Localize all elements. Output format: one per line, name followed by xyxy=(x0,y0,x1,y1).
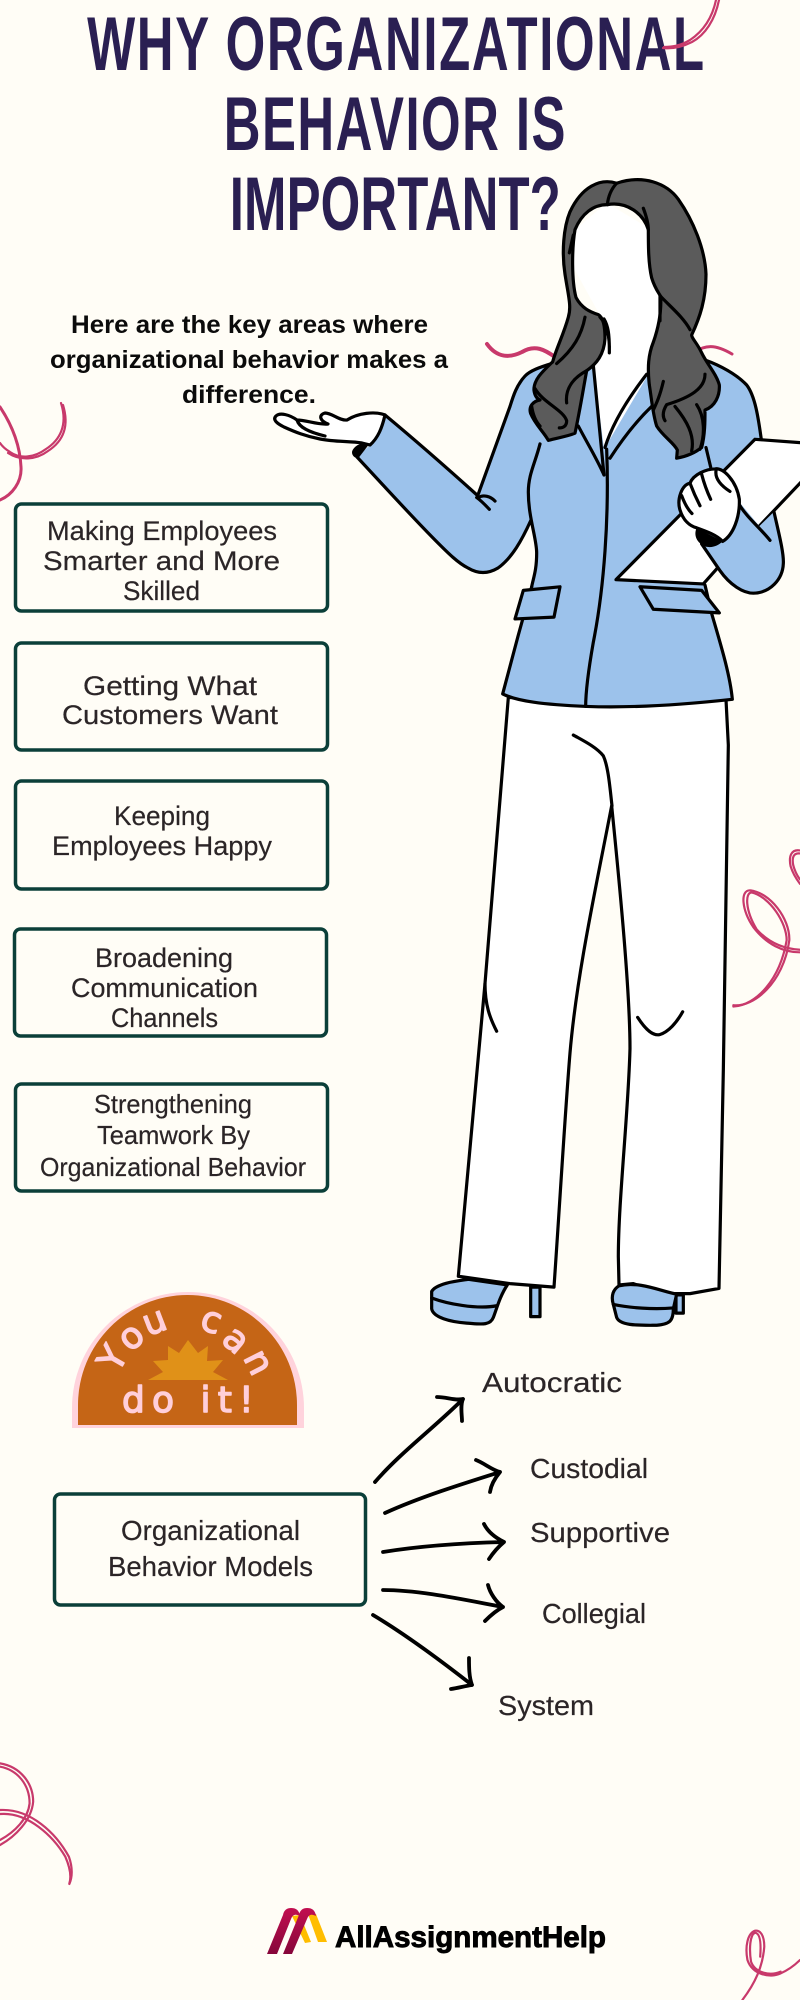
list box: skills: Smarter and More xyxy=(43,546,280,576)
arrow: custodial xyxy=(385,1460,500,1513)
list box: teamwork: Organizational Behavior xyxy=(40,1152,306,1182)
models box: Organizational xyxy=(121,1515,300,1546)
hand with cuff xyxy=(679,469,739,547)
cuff xyxy=(353,444,368,457)
squiggle: shoulder wave right xyxy=(695,347,732,354)
subtitle text: difference. xyxy=(182,381,316,409)
pockets xyxy=(515,587,560,619)
badge: you can do it: u xyxy=(136,1298,172,1345)
hair xyxy=(530,180,719,458)
arrow: supportive xyxy=(383,1524,504,1559)
sun icon xyxy=(148,1340,228,1380)
squiggle: upper left xyxy=(0,403,66,500)
list box: happy employees xyxy=(16,781,328,889)
right shoe xyxy=(612,1284,683,1325)
squiggle: bottom left xyxy=(0,1763,72,1884)
arrow: collegial xyxy=(383,1585,503,1621)
model labels: Autocratic xyxy=(482,1367,622,1398)
list box: skills xyxy=(16,504,328,611)
list box: communication: Communication xyxy=(71,973,258,1003)
face and neck xyxy=(573,203,663,449)
woman illustration xyxy=(275,180,800,1325)
logo mark xyxy=(267,1908,327,1954)
models box: Behavior Models xyxy=(108,1551,313,1582)
list box: skills: Making Employees xyxy=(47,516,277,546)
list box: communication: Channels xyxy=(111,1003,218,1033)
badge: you can do it: n xyxy=(235,1343,282,1382)
list box: happy employees: Employees Happy xyxy=(52,831,272,861)
pants xyxy=(432,697,728,1325)
jacket details xyxy=(578,365,652,475)
model labels xyxy=(482,1367,670,1721)
subtitle text: organizational behavior makes a xyxy=(50,346,449,374)
arrow: system xyxy=(373,1615,472,1689)
squiggle: top right xyxy=(663,0,719,48)
left shoe xyxy=(432,1279,540,1324)
badge: you can do it: it! xyxy=(200,1380,254,1421)
badge: you can do it: Y xyxy=(90,1338,137,1379)
title xyxy=(87,1,704,246)
badge: you can do it xyxy=(72,1292,304,1428)
models box xyxy=(54,1494,366,1605)
list box: skills: Skilled xyxy=(123,576,200,606)
badge: you can do it: do xyxy=(122,1380,174,1421)
badge: you can do it: o xyxy=(109,1314,153,1360)
list box: customers: Getting What xyxy=(83,671,258,701)
badge: you can do it: a xyxy=(214,1317,258,1363)
upper body xyxy=(477,180,800,707)
model labels: System xyxy=(498,1690,594,1721)
list box: happy employees: Keeping xyxy=(114,801,210,831)
list box: teamwork: Strengthening xyxy=(94,1089,252,1119)
model labels: Custodial xyxy=(530,1453,648,1484)
list box: communication xyxy=(14,929,326,1036)
list box: communication: Broadening xyxy=(95,943,233,973)
subtitle text xyxy=(50,311,449,409)
title: BEHAVIOR IS xyxy=(224,81,565,166)
model labels: Supportive xyxy=(530,1517,670,1548)
jacket xyxy=(478,360,763,707)
left sleeve and hand xyxy=(275,413,535,572)
subtitle text: Here are the key areas where xyxy=(71,311,428,339)
list box: customers: Customers Want xyxy=(62,700,279,730)
clipboard xyxy=(616,439,800,584)
title: WHY ORGANIZATIONAL xyxy=(87,1,704,86)
jacket outline xyxy=(478,360,762,707)
logo xyxy=(267,1908,606,1954)
badge: you can do it: c xyxy=(196,1298,227,1343)
right sleeve xyxy=(702,503,783,593)
logo wordmark: AllAssignmentHelp xyxy=(335,1921,606,1954)
list box: customers xyxy=(16,643,328,750)
model labels: Collegial xyxy=(542,1598,646,1629)
list box: teamwork xyxy=(16,1084,328,1191)
hand xyxy=(275,413,385,445)
squiggle: middle right xyxy=(733,850,800,1007)
list box: teamwork: Teamwork By xyxy=(97,1120,250,1150)
squiggle: bottom right xyxy=(742,1931,800,2000)
title: IMPORTANT? xyxy=(230,161,561,246)
squiggle: shoulder wave left xyxy=(487,344,590,360)
arrow: autocratic xyxy=(375,1397,463,1482)
